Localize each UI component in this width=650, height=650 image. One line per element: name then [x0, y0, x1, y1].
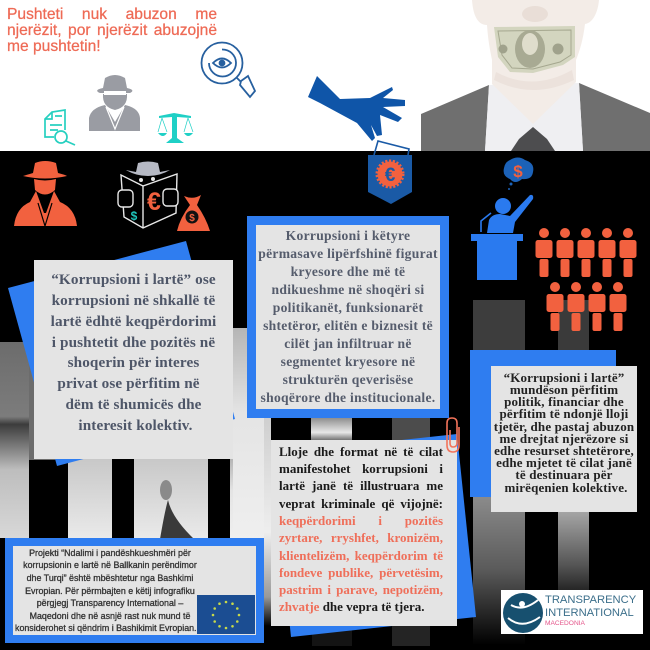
card text: i pushtetit dhe pozitës në [52, 334, 215, 351]
icon: spy behind newspaper with euro: $ [131, 209, 138, 223]
card text: interesit kolektiv. [78, 417, 193, 434]
card text: “Korrupsioni i lartë” ose [51, 271, 216, 288]
card text: dëm të shumicës dhe [65, 396, 202, 413]
icon: ballot box with euro: € [385, 165, 396, 186]
chin shadow [494, 70, 574, 90]
card text [34, 260, 233, 459]
card text: përmasave lipërfshinë figurat [258, 246, 438, 261]
card text: Korrupsioni i këtyre [286, 228, 410, 243]
disclaimer text: Maqedoni dhe në asnjë rast nuk mund të [30, 611, 190, 621]
card text: strukturën qeverisëse [283, 372, 413, 387]
panel: who is involved [247, 216, 449, 418]
card text: zhvatje dhe vepra të tjera. [279, 599, 424, 614]
face and neck [472, 0, 599, 124]
card text: “Korrupsioni i lartë” [504, 370, 624, 385]
card text: korrupsioni në shkallë të [52, 292, 215, 309]
panel: EU project disclaimer [5, 538, 264, 643]
icon: speaker at lectern with dollar thought bubble: $ [513, 162, 523, 181]
card text: përfitim të ndonjë lloji [500, 406, 628, 421]
title: Pushteti nuk abuzon me [7, 6, 217, 23]
logo: Transparency International Macedonia: MACEDONIA [545, 620, 585, 627]
card text: tjetër, dhe pastaj abuzon [494, 419, 634, 434]
nose [522, 6, 548, 22]
panel: forms of corruption [271, 434, 476, 637]
panel: definition of grand corruption [8, 241, 235, 466]
card text: kryesore dhe më të [291, 264, 405, 279]
card text: Lloje dhe format në të cilat [279, 444, 443, 459]
card text: edhe resurset shtetërore, [494, 443, 634, 458]
card text: manifestohet korrupsioni i [279, 461, 443, 476]
card text: edhe mjetet të cilat janë [496, 455, 632, 470]
card text: mirëqenien kolektive. [504, 480, 628, 495]
card text: lartë ëdhtë keqpërdorimi [51, 313, 216, 330]
card text: politik, financiar dhe [504, 394, 624, 409]
icon: spy behind newspaper with euro: € [147, 188, 161, 216]
dollar bill [494, 26, 575, 73]
card text: me drejtat njerëzore si [500, 431, 628, 446]
card text: mundëson përfitim [510, 382, 618, 397]
card text: lartë janë të illustruara me [279, 478, 443, 493]
card text: ndikueshme në shoqëri si [272, 282, 424, 297]
tilted blue backing [290, 434, 476, 637]
blue backing [470, 350, 616, 497]
logo mark [503, 593, 543, 633]
title [7, 6, 217, 55]
card text: shtetëror, elitën e biznesit të [263, 318, 433, 333]
card text [256, 225, 440, 409]
card text: veprat kriminale që vijojnë: [279, 496, 443, 511]
tie [511, 127, 555, 151]
card text: fondeve publike, përvetësim, [279, 565, 443, 580]
suit [421, 83, 650, 151]
card text [491, 366, 637, 512]
disclaimer text: përgjegj Transparency International – [37, 598, 183, 608]
logo: Transparency International Macedonia [501, 590, 643, 634]
tilted blue backing [8, 241, 235, 466]
card text: cilët jan infiltruar në [284, 336, 412, 351]
icon: orange money bag: $ [189, 213, 195, 224]
card text: politikanët, funksionarët [273, 300, 423, 315]
title: me pushtetin! [7, 38, 101, 55]
disclaimer text [13, 546, 256, 635]
disclaimer text: Projekti “Ndalimi i pandëshkueshmëri për [29, 548, 191, 558]
card text: shoqërore dhe institucionale. [261, 390, 435, 405]
card text [271, 440, 457, 626]
shirt [485, 83, 583, 151]
card text: segmentet kryesore në [281, 354, 415, 369]
disclaimer text: korrupsionin e lartë në Ballkanin perëndimor [23, 560, 197, 570]
disclaimer text: Evropian. Për përmbajten e këtij infografiku [25, 586, 195, 596]
card text: privat ose përfitim në [57, 375, 200, 392]
card text: klientelizëm, keqpërdorim të [279, 548, 443, 563]
logo text: TRANSPARENCY [545, 594, 636, 606]
panel: consequences of grand corruption [470, 350, 637, 512]
logo: Transparency International Macedonia: INTERNATIONAL [545, 607, 634, 619]
disclaimer text: konsiderohet si qëndrim i Bashikimit Evropian. [15, 623, 197, 633]
card text: pastrim i parave, nepotizëm, [279, 582, 443, 597]
title: njerëzit, por njerëzit abuzojnë [7, 22, 217, 39]
card text: keqpërdorimi i pozitës [279, 513, 443, 528]
card text: zyrtare, rryshfet, kronizëm, [279, 530, 443, 545]
disclaimer text: dhe Turqi” është mbështetur nga Bashkimi [27, 573, 193, 583]
card text: të destinuara për [515, 467, 613, 482]
card text: shoqerin për interes [68, 354, 199, 371]
